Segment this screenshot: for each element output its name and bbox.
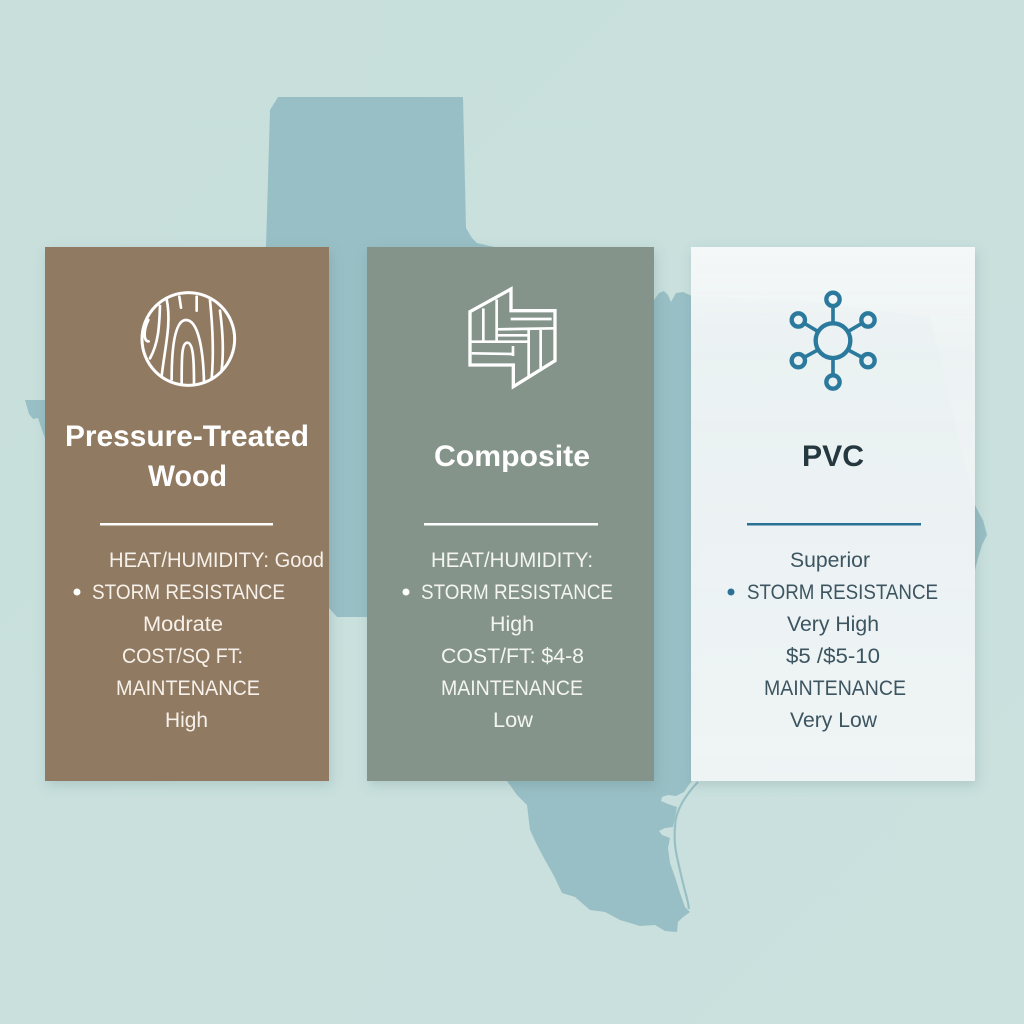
text block: COST/FT: $4-8 [441,645,584,668]
text block: MAINTENANCE [116,677,260,700]
text block: High [165,709,208,732]
text block: Low [493,709,534,732]
text block: HEAT/HUMIDITY: [431,549,593,572]
text block: MAINTENANCE [764,677,906,700]
heading: Composite [434,440,590,473]
text block: $5 /$5-10 [786,645,880,668]
text block [421,549,613,732]
map: Texas silhouette [25,97,987,932]
icon: network molecule [792,293,875,389]
text block: HEAT/HUMIDITY: Good [109,549,324,572]
text block: Superior [790,549,870,572]
text block [747,549,938,732]
text block: Very High [787,613,879,636]
panel: pressure-treated wood [45,247,329,781]
icon: wood grain [142,293,235,385]
text block: Modrate [143,613,223,636]
panel: pvc [691,247,975,781]
bullet [728,588,734,596]
heading [65,420,309,493]
text block: STORM RESISTANCE [92,581,285,604]
bullet [402,588,410,596]
icon: composite boards [470,289,555,387]
heading: Wood [148,460,227,493]
heading: Pressure-Treated [65,420,309,453]
text block: Very Low [790,709,878,732]
map: barrier island [675,782,698,909]
text block: High [490,613,534,636]
heading: PVC [802,440,864,473]
text block: STORM RESISTANCE [421,581,613,604]
bullet [74,588,80,596]
text block: MAINTENANCE [441,677,583,700]
text block: STORM RESISTANCE [747,581,938,604]
panel: composite [367,247,654,781]
text block [92,549,324,732]
text block: COST/SQ FT: [122,645,243,668]
